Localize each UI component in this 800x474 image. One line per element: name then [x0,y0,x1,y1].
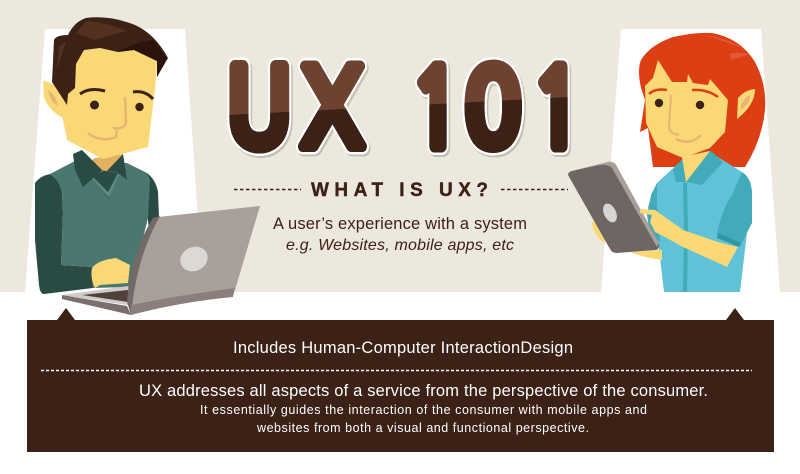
pointer: left [57,308,75,320]
woman's shirt [648,152,752,292]
title: UX 101: U [225,57,293,164]
tablet [568,162,659,253]
text: definition: A user’s experience with a system [273,215,527,233]
title: UX 101: 1 [531,56,583,164]
title: UX 101: U [227,59,294,166]
title: UX 101: X [301,57,364,164]
title: UX 101: 0 [465,60,524,166]
text: examples: e.g. Websites, mobile apps, etc [286,237,514,254]
heading: what is UX: WHAT IS UX? [311,180,488,201]
laptop logo [176,242,212,276]
tablet logo [600,201,620,225]
man's hair [52,17,168,105]
title: UX 101: U [225,57,293,164]
title: UX 101: X [301,57,364,164]
panel body text: It essentially guides the interaction of the consumer with mobile apps and [200,403,647,417]
background band [0,0,800,292]
title: UX 101: 1 [411,58,464,166]
title: UX 101: 0 [464,58,522,164]
spotlight: right [601,29,780,292]
panel background [27,320,774,452]
panel heading: Includes Human-Computer InteractionDesign [233,339,573,357]
woman's arm [640,209,738,267]
title: UX 101: 0 [464,58,522,164]
spotlight: left [25,29,203,292]
title: UX 101: 1 [410,56,462,164]
man's features [80,90,105,94]
title: UX 101: 0 [464,58,522,164]
title: UX 101: X [301,57,364,164]
panel body text: websites from both a visual and functional perspective. [256,421,589,435]
pointer: right [726,308,744,320]
man's face [60,48,157,159]
panel lead text: UX addresses all aspects of a service from the perspective of the consumer. [139,382,708,400]
woman's ear [737,89,755,119]
laptop lid [131,206,260,306]
illustration: woman with tablet [568,33,765,292]
woman's hair [639,33,765,167]
title: UX 101: 1 [531,56,583,164]
title: UX 101: U [225,57,293,164]
panel: includes [27,308,774,452]
woman's face [645,60,728,158]
title: UX 101: 1 [532,58,585,166]
panel body text [200,403,647,435]
title: UX 101: X [302,59,365,166]
title: UX 101: 1 [410,56,462,164]
illustration: man with laptop [35,17,260,315]
woman's features [649,90,667,94]
man's hand [91,258,130,288]
title: UX 101: 1 [531,56,583,164]
title: UX 101: 1 [410,56,462,164]
title: UX 101 [227,57,572,158]
man's ear [43,81,63,118]
